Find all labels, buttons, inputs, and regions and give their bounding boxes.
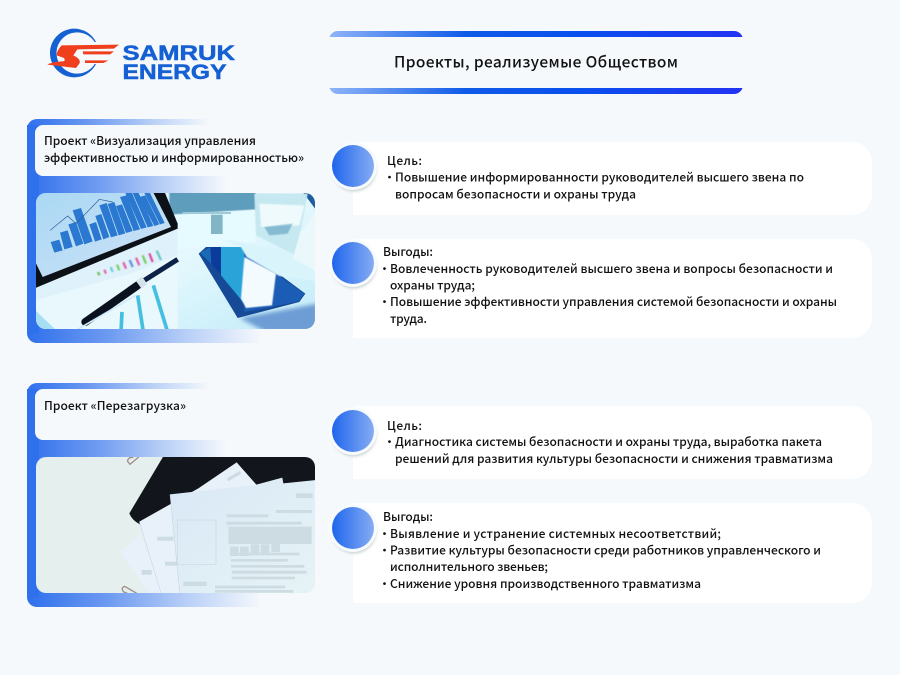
photo: tablet with charts, pen and phone	[35, 191, 318, 332]
logo wordmark: SAMRUK	[122, 42, 235, 65]
goal text: Цель:	[387, 152, 422, 169]
card: project 1 goal	[329, 142, 872, 215]
goal text: •	[384, 433, 396, 450]
tablet bezel	[35, 191, 178, 288]
pen	[85, 285, 138, 322]
card: project 2 goal	[329, 406, 872, 479]
panel: project 2	[27, 383, 317, 607]
sheet 3	[170, 478, 317, 595]
panel frame strips	[27, 383, 262, 607]
goal text: Диагностика системы безопасности и охраны труда, выработка пакета	[395, 433, 822, 450]
benefits text: Выгоды:	[383, 508, 433, 525]
bar chart	[51, 193, 165, 253]
logo: Samruk Energy	[47, 29, 235, 84]
panel: project 1	[27, 119, 318, 343]
benefits text	[378, 243, 837, 327]
circle marker	[329, 239, 377, 288]
benefits text: •	[378, 542, 391, 558]
goal text: решений для развития культуры безопасности и снижения травматизма	[395, 450, 833, 467]
photo left half: tablet, pen, paper	[35, 191, 178, 332]
panel frame strips	[27, 119, 262, 343]
goal text	[384, 152, 804, 202]
benefits text	[378, 508, 821, 592]
sheet 2	[139, 462, 267, 595]
benefits text: исполнительного звеньев;	[390, 558, 548, 575]
project 2 heading card: Проект «Перезагрузка»	[44, 397, 186, 414]
benefits text: Выгоды:	[383, 243, 433, 260]
logo: Samruk Energy: ENERGY	[122, 61, 226, 84]
goal text: Повышение информированности руководителей высшего звена по	[395, 168, 804, 186]
keyboard	[129, 456, 317, 524]
benefits text: Снижение уровня производственного травматизма	[390, 575, 701, 592]
benefits text: Вовлеченность руководителей высшего звена и вопросы безопасности и	[390, 260, 833, 277]
goal text: вопросам безопасности и охраны труда	[395, 186, 636, 202]
benefits text: Повышение эффективности управления системой безопасности и охраны	[390, 293, 837, 310]
sheet details	[142, 471, 313, 593]
photo right half: laptop, glass, phone	[169, 192, 318, 332]
benefits text: •	[378, 260, 391, 277]
card: project 2 benefits	[329, 503, 872, 603]
project 1 heading card: эффективностью и информированностью»	[44, 149, 304, 166]
teal lines on paper	[121, 285, 168, 332]
logo emblem	[47, 29, 119, 77]
rainbow printed chart	[98, 251, 161, 275]
circle marker	[329, 407, 377, 456]
card: project 1 benefits	[329, 239, 872, 338]
benefits text: •	[378, 293, 391, 310]
paper clips	[127, 457, 139, 464]
goal text: •	[384, 168, 396, 186]
project 2 heading card	[35, 389, 240, 440]
photo: documents on keyboard	[36, 456, 317, 595]
circle marker	[329, 142, 377, 191]
project 1 heading card: Проект «Визуализация управления	[44, 132, 256, 149]
benefits text: охраны труда;	[390, 276, 475, 294]
goal text	[384, 417, 833, 467]
benefits text: •	[378, 575, 391, 592]
sheet 1	[120, 534, 160, 593]
benefits text: •	[378, 525, 391, 542]
project 1 heading card	[35, 125, 304, 176]
goal text: Цель:	[387, 417, 422, 434]
tablet screen	[35, 191, 171, 277]
benefits text: Развитие культуры безопасности среди работников управленческого и	[390, 542, 821, 558]
title text: Проекты, реализуемые Обществом	[394, 50, 678, 72]
title banner	[327, 31, 745, 94]
benefits text: Выявление и устранение системных несоответствий;	[390, 525, 721, 542]
circle marker	[329, 504, 377, 553]
benefits text: труда.	[390, 310, 427, 327]
